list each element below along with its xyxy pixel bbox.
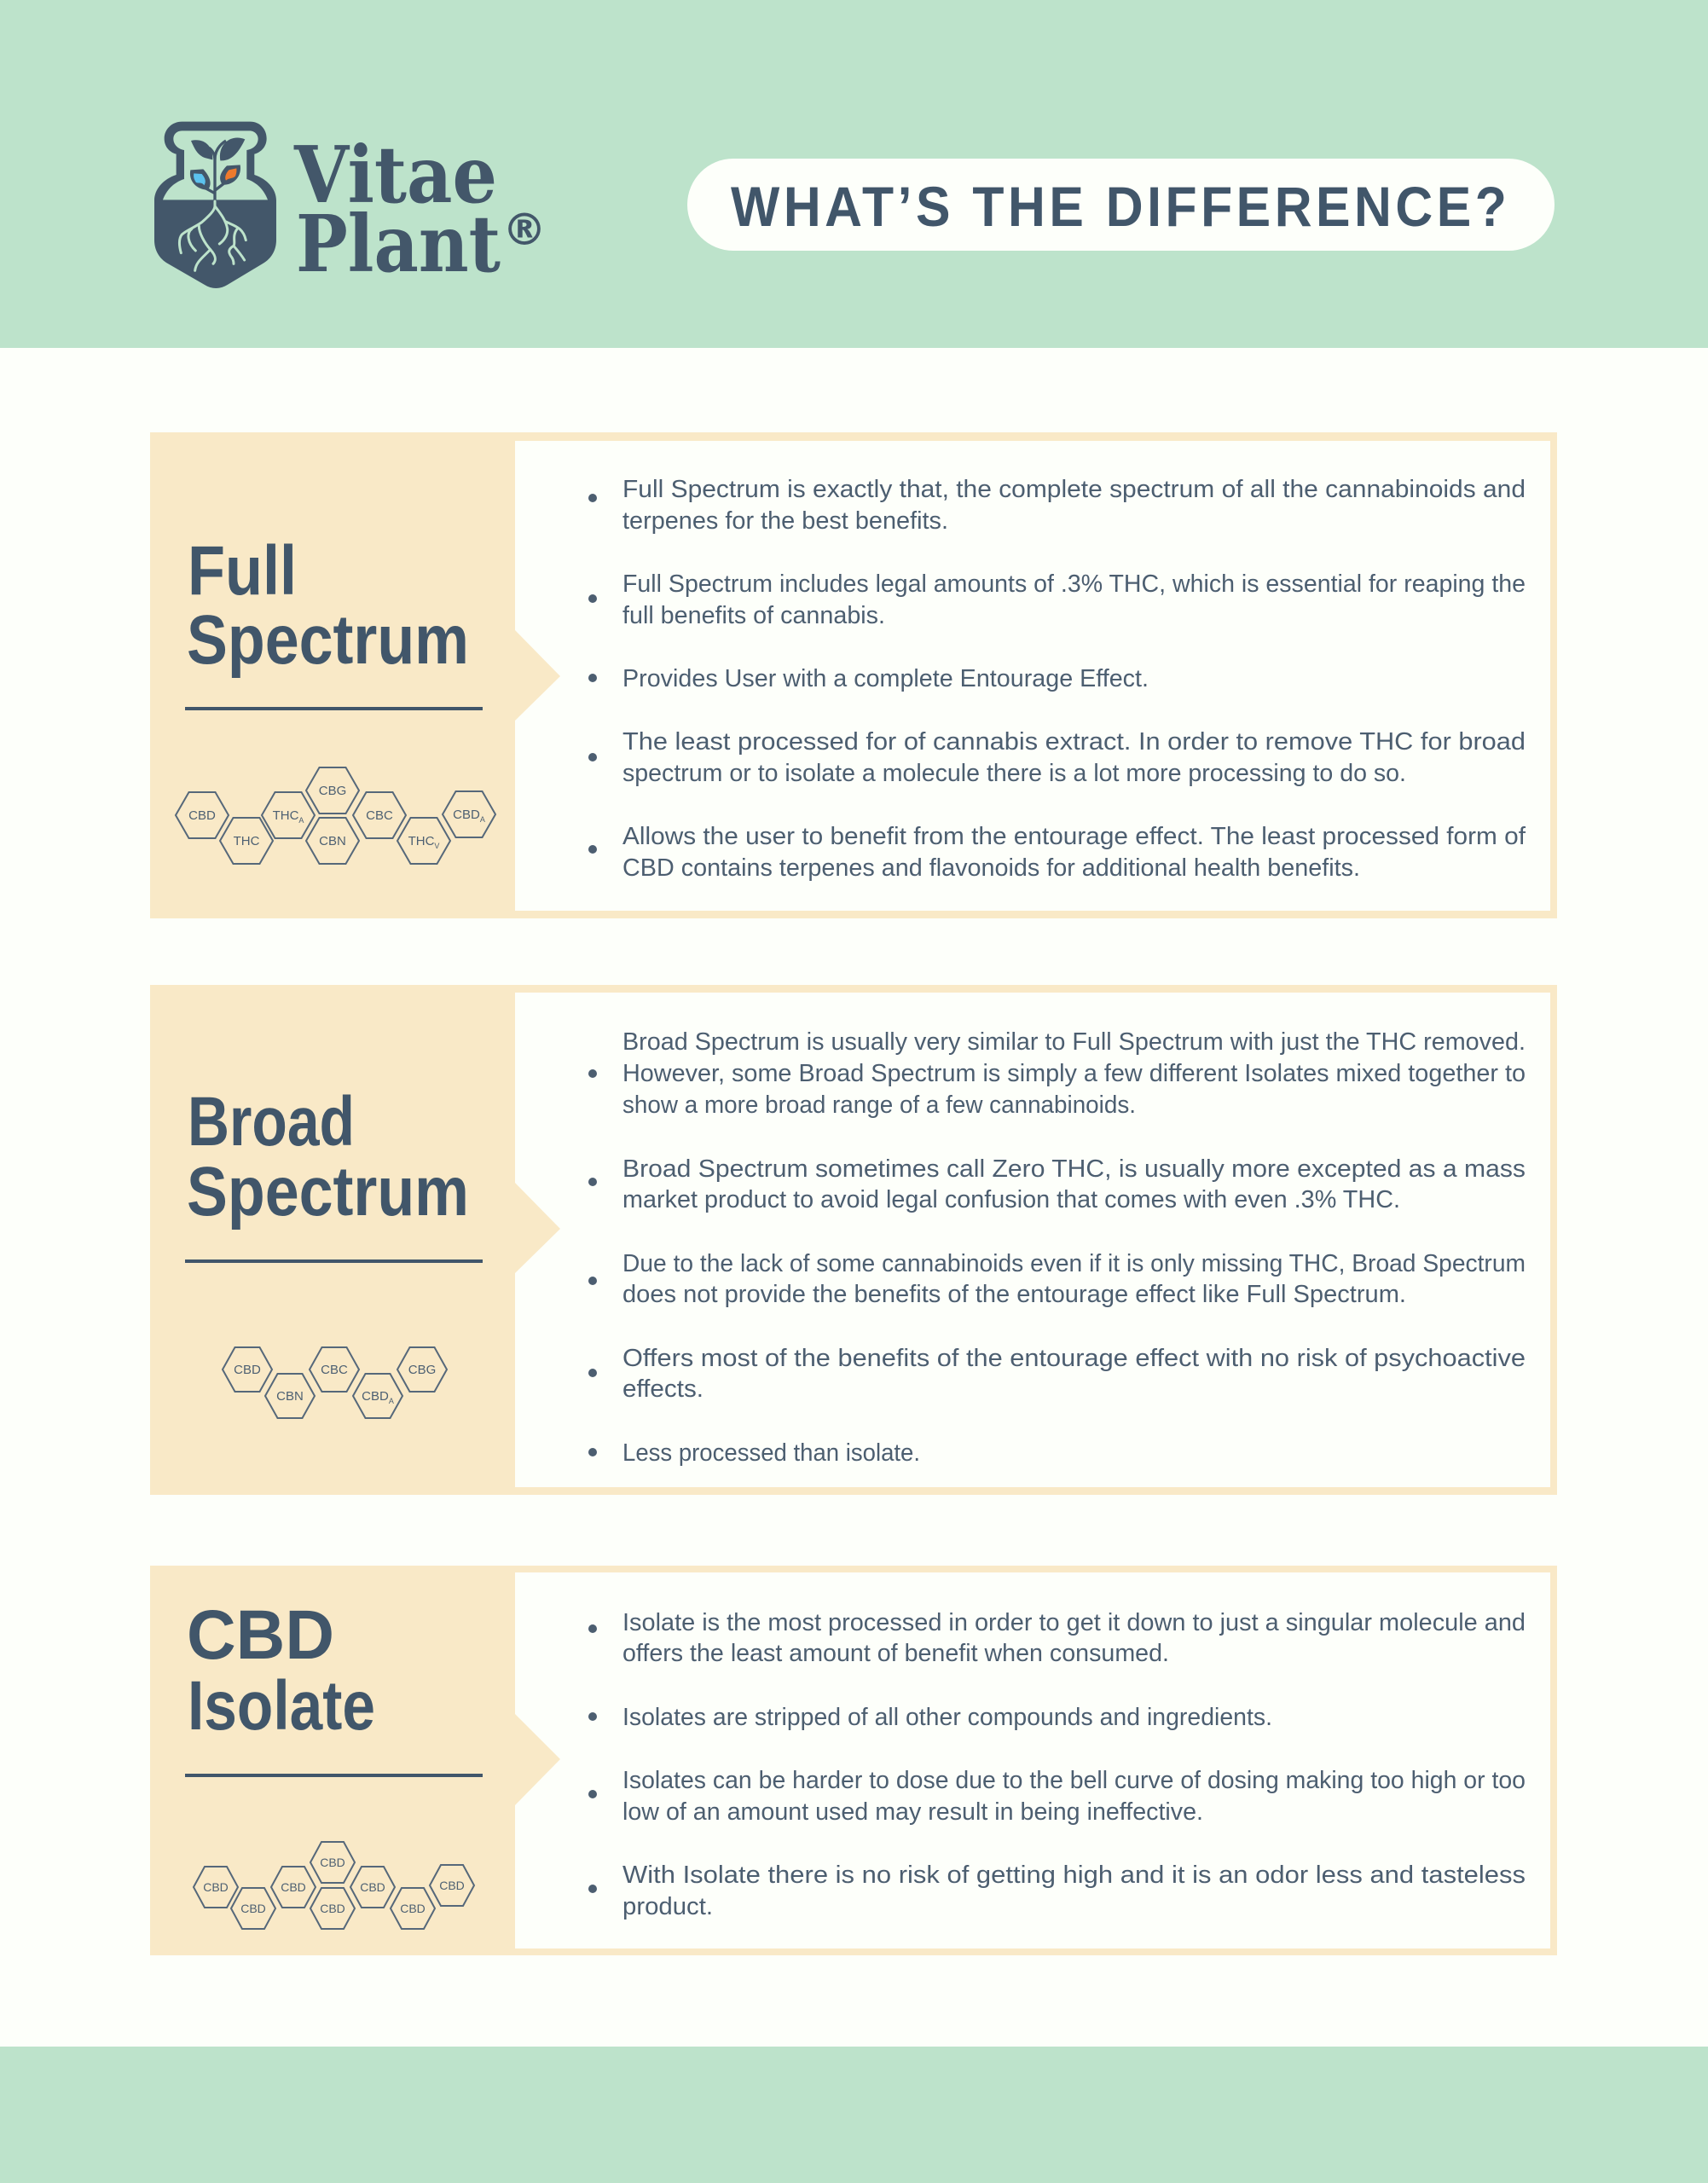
cannabinoid hexagons: CBD xyxy=(320,1902,345,1915)
logo: Vitae Plant: ® xyxy=(502,205,547,256)
panel: Full Spectrum xyxy=(150,432,1557,918)
cannabinoid hexagons: THC xyxy=(408,834,434,848)
cannabinoid hexagons xyxy=(194,1842,474,1929)
cannabinoid hexagons: CBD xyxy=(281,1880,306,1894)
panel content area xyxy=(515,993,1550,1487)
heading: Isolate xyxy=(188,1667,375,1745)
cannabinoid hexagons: CBD xyxy=(360,1880,385,1894)
heading xyxy=(187,1596,375,1745)
bullet list: Less processed than isolate. xyxy=(622,1439,920,1467)
panel content area xyxy=(515,1572,1550,1948)
cannabinoid hexagons xyxy=(223,1347,447,1418)
bullet list: Isolates are stripped of all other compounds and ingredients. xyxy=(622,1704,1272,1731)
bullet list: product. xyxy=(622,1893,713,1920)
logo: Vitae Plant: Plant xyxy=(296,198,501,290)
heading: Full xyxy=(188,532,297,610)
heading xyxy=(187,1083,469,1230)
cannabinoid hexagons: A xyxy=(480,815,485,824)
bullet list: effects. xyxy=(622,1375,703,1403)
bullet list: Isolate is the most processed in order to get it down to just a singular molecule and xyxy=(622,1609,1526,1636)
bullet list: Full Spectrum includes legal amounts of .3% THC, which is essential for reaping the xyxy=(622,570,1526,598)
cannabinoid hexagons: A xyxy=(389,1397,394,1405)
cannabinoid hexagons: CBN xyxy=(319,834,346,848)
cannabinoid hexagons: CBD xyxy=(362,1389,389,1404)
bullet list: The least processed for of cannabis extract. In order to remove THC for broad xyxy=(622,728,1526,756)
bullet list: full benefits of cannabis. xyxy=(622,602,885,629)
bullet list xyxy=(588,476,1526,882)
heading: Spectrum xyxy=(187,601,469,679)
cannabinoid hexagons: CBD xyxy=(400,1902,426,1915)
cannabinoid hexagons: V xyxy=(434,842,439,850)
heading: Spectrum xyxy=(187,1153,469,1230)
bullet list: However, some Broad Spectrum is simply a few different Isolates mixed together to xyxy=(622,1060,1526,1087)
title pill xyxy=(687,159,1555,251)
cannabinoid hexagons: THC xyxy=(234,834,260,848)
bullet list: show a more broad range of a few cannabinoids. xyxy=(622,1092,1136,1119)
bullet list: terpenes for the best benefits. xyxy=(622,507,948,535)
panel background xyxy=(150,985,1557,1495)
panel: CBD Isolate xyxy=(150,1566,1557,1955)
cannabinoid hexagons: CBG xyxy=(408,1363,436,1377)
cannabinoid hexagons: CBC xyxy=(366,808,393,823)
cannabinoid hexagons: CBC xyxy=(321,1363,348,1377)
bullet list: Due to the lack of some cannabinoids even if it is only missing THC, Broad Spectrum xyxy=(622,1250,1526,1277)
bullet list: Broad Spectrum is usually very similar to Full Spectrum with just the THC removed. xyxy=(622,1028,1526,1056)
cannabinoid hexagons xyxy=(176,767,495,864)
bullet list xyxy=(588,1609,1526,1920)
header band xyxy=(0,0,1708,348)
cannabinoid hexagons: THC xyxy=(273,808,298,823)
footer band xyxy=(0,2047,1708,2183)
bullet list xyxy=(588,1028,1526,1467)
panel: Broad Spectrum xyxy=(150,985,1557,1495)
cannabinoid hexagons: CBD xyxy=(234,1363,261,1377)
bullet list: With Isolate there is no risk of getting high and it is an odor less and tasteless xyxy=(622,1862,1526,1889)
heading xyxy=(187,532,469,679)
cannabinoid hexagons: CBN xyxy=(276,1389,304,1404)
bullet list: Isolates can be harder to dose due to the bell curve of dosing making too high or too xyxy=(622,1767,1526,1794)
cannabinoid hexagons: CBD xyxy=(320,1856,345,1869)
heading: CBD xyxy=(187,1596,334,1674)
cannabinoid hexagons: CBD xyxy=(240,1902,266,1915)
panel background xyxy=(150,1566,1557,1955)
cannabinoid hexagons: A xyxy=(298,816,304,825)
panel background xyxy=(150,432,1557,918)
bullet list: Allows the user to benefit from the entourage effect. The least processed form of xyxy=(622,823,1526,850)
cannabinoid hexagons: CBD xyxy=(188,808,216,823)
cannabinoid hexagons: CBD xyxy=(203,1880,229,1894)
bullet list: Full Spectrum is exactly that, the complete spectrum of all the cannabinoids and xyxy=(622,476,1526,503)
title pill: WHAT’S THE DIFFERENCE? xyxy=(731,177,1507,239)
bullet list: Provides User with a complete Entourage Effect. xyxy=(622,665,1149,692)
bullet list: spectrum or to isolate a molecule there is a lot more processing to do so. xyxy=(622,760,1406,787)
cannabinoid hexagons: CBG xyxy=(319,784,346,798)
bullet list: does not provide the benefits of the entourage effect like Full Spectrum. xyxy=(622,1281,1406,1308)
heading: Broad xyxy=(188,1083,355,1161)
bullet list: Offers most of the benefits of the entourage effect with no risk of psychoactive xyxy=(622,1345,1526,1372)
panel content area xyxy=(515,441,1550,911)
logo: Vitae Plant xyxy=(154,122,547,290)
bullet list: market product to avoid legal confusion that comes with even .3% THC. xyxy=(622,1186,1400,1213)
bullet list: CBD contains terpenes and flavonoids for additional health benefits. xyxy=(622,854,1360,882)
cannabinoid hexagons: CBD xyxy=(453,808,480,822)
icon: flask with plant and roots xyxy=(154,122,276,288)
cannabinoid hexagons: CBD xyxy=(439,1879,465,1892)
wordmark: Vitae xyxy=(293,129,497,221)
bullet list: offers the least amount of benefit when consumed. xyxy=(622,1640,1169,1667)
bullet list: Broad Spectrum sometimes call Zero THC, is usually more excepted as a mass xyxy=(622,1155,1526,1183)
bullet list: low of an amount used may result in being ineffective. xyxy=(622,1798,1203,1826)
